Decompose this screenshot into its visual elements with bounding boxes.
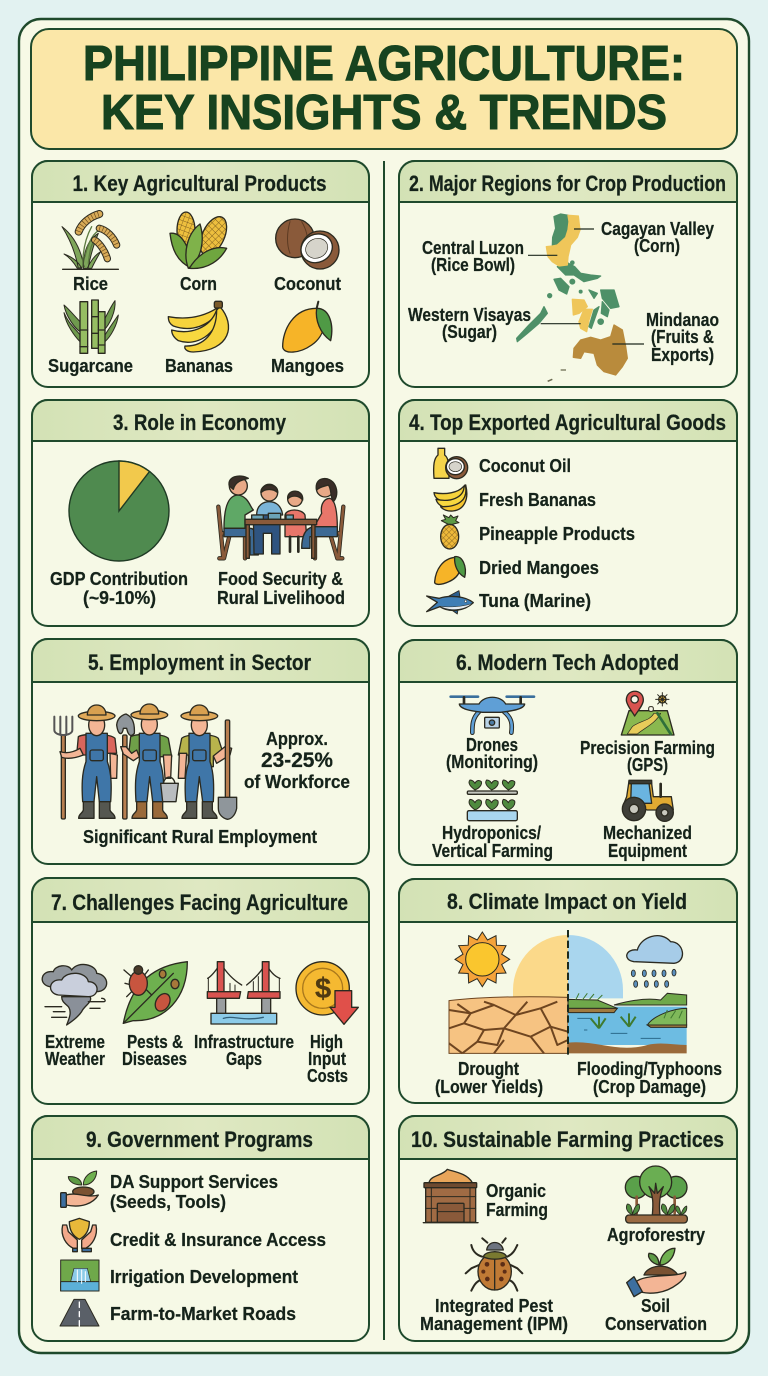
label: equipment: Equipment (608, 841, 687, 861)
panel: 10. Sustainable Farming Practices: 10. Sustainable Farming Practices (411, 1127, 724, 1152)
label: seeds and tools: (Seeds, Tools) (110, 1192, 226, 1212)
label: sugar: (Sugar) (442, 322, 497, 342)
panel: 4. Top Exported Agricultural Goods (399, 400, 737, 626)
label: infrastructure: Infrastructure (194, 1032, 294, 1052)
icon: tuna (427, 591, 473, 614)
icon: beneficial beetle (466, 1238, 522, 1291)
icon: dollar sign: $ (315, 973, 331, 1005)
tool: spade (218, 720, 237, 819)
panel: 1. Key Agricultural Products (32, 161, 369, 387)
label: corn region: (Corn) (634, 236, 680, 256)
label: exports: Exports) (651, 345, 714, 365)
panel: 3. Role in Economy (32, 400, 369, 626)
label: high: High (310, 1032, 343, 1052)
icon: three farmers with tools (54, 704, 237, 819)
icon: high input costs (296, 962, 358, 1024)
illustration: drought versus flood (449, 930, 687, 1055)
label: Mindanao: Mindanao (646, 310, 719, 330)
label: pineapple products: Pineapple Products (479, 524, 635, 544)
tool: pitchfork (54, 717, 72, 819)
label: rural employment: Significant Rural Employment (83, 827, 317, 847)
icon: dried mango (435, 557, 465, 584)
label: hydroponics: Hydroponics/ (442, 823, 541, 843)
label: bananas: Bananas (165, 356, 233, 376)
label: farming: Farming (486, 1200, 548, 1220)
label: IPM: Management (IPM) (420, 1314, 568, 1334)
label: coconut oil: Coconut Oil (479, 456, 571, 476)
icon: corn (170, 212, 232, 269)
label: conservation: Conservation (605, 1314, 707, 1334)
column divider (383, 161, 385, 1340)
icon: compost bin (423, 1169, 478, 1223)
title banner: PHILIPPINE AGRICULTURE: (83, 37, 685, 91)
label: diseases: Diseases (122, 1049, 187, 1069)
label: coconut: Coconut (274, 274, 341, 294)
label: soil: Soil (641, 1296, 670, 1316)
label: drought: Drought (458, 1059, 519, 1079)
label: gaps: Gaps (226, 1049, 262, 1069)
label: fruits and: (Fruits & (651, 327, 714, 347)
farmer three (178, 705, 232, 818)
label: mechanized: Mechanized (603, 823, 692, 843)
label: mangoes: Mangoes (271, 356, 344, 376)
icon: mango (283, 302, 332, 352)
map of the Philippines (517, 214, 644, 382)
icon: soil conservation (627, 1248, 686, 1297)
icon: infrastructure gaps (207, 962, 280, 1024)
panel: 5. Employment in Sector: 5. Employment in Sector (88, 650, 311, 675)
icon: road (60, 1299, 99, 1326)
icon: family at table (218, 476, 343, 558)
icon: agroforestry (625, 1166, 687, 1223)
icon: rice (62, 214, 118, 269)
label: tuna: Tuna (Marine) (479, 591, 591, 611)
label: monitoring: (Monitoring) (446, 752, 538, 772)
panel: 8. Climate Impact on Yield (399, 879, 737, 1103)
label: GDP share: (~9-10%) (83, 588, 156, 608)
label: GDP contribution: GDP Contribution (50, 569, 188, 589)
icon: irrigation (61, 1260, 99, 1291)
icon: hydroponics (467, 780, 517, 821)
flood side (568, 935, 687, 1053)
icon: drone (451, 697, 534, 733)
icon: support services (61, 1171, 98, 1207)
icon: bananas (168, 301, 229, 352)
panel: 3. Role in Economy: 3. Role in Economy (113, 410, 286, 435)
label: dried mangoes: Dried Mangoes (479, 558, 599, 578)
label: extreme: Extreme (45, 1032, 105, 1052)
panel: 8. Climate Impact on Yield: 8. Climate Impact on Yield (447, 889, 687, 914)
label: sugarcane: Sugarcane (48, 356, 133, 376)
panel: 9. Government Programs: 9. Government Programs (86, 1127, 313, 1152)
icon: coconut oil (434, 448, 468, 479)
icon: GPS precision farming (621, 691, 674, 735)
icon: fresh bananas (434, 485, 467, 511)
stat: workforce share: of Workforce (244, 772, 350, 792)
icon: extreme weather (42, 964, 107, 1025)
panel: 2. Major Regions for Crop Production (399, 161, 737, 387)
label: pests: Pests & (127, 1032, 183, 1052)
icon: pineapple (441, 515, 459, 549)
label: corn: Corn (180, 274, 217, 294)
label: vertical farming: Vertical Farming (432, 841, 553, 861)
panel: 5. Employment in Sector (32, 639, 369, 864)
label: lower yields: (Lower Yields) (435, 1077, 543, 1097)
panel: 9. Government Programs (32, 1116, 369, 1341)
panel: 1. Key Agricultural Products: 1. Key Agricultural Products (72, 171, 326, 196)
title banner: KEY INSIGHTS & TRENDS (101, 86, 667, 140)
icon: tractor (622, 780, 673, 821)
drought side (449, 932, 568, 1053)
label: organic: Organic (486, 1181, 546, 1201)
label: credit and insurance: Credit & Insurance Access (110, 1230, 326, 1250)
label: fresh bananas: Fresh Bananas (479, 490, 596, 510)
icon: credit and insurance (62, 1218, 96, 1252)
panel: 6. Modern Tech Adopted (399, 640, 737, 865)
label: GPS: (GPS) (627, 755, 668, 775)
panel: 10. Sustainable Farming Practices (399, 1116, 737, 1341)
icon: sugarcane (64, 300, 118, 353)
label: Cagayan Valley: Cagayan Valley (601, 219, 714, 239)
label: drones: Drones (466, 735, 518, 755)
panel: 6. Modern Tech Adopted: 6. Modern Tech Adopted (456, 650, 679, 675)
label: costs: Costs (307, 1066, 348, 1086)
label: agroforestry: Agroforestry (607, 1225, 705, 1245)
label: integrated pest: Integrated Pest (435, 1296, 553, 1316)
label: food security: Food Security & (218, 569, 343, 589)
icon: coconut (276, 219, 339, 269)
label: crop damage: (Crop Damage) (593, 1077, 706, 1097)
label: Central Luzon: Central Luzon (422, 238, 524, 258)
stat: workforce share: Approx. (266, 729, 328, 749)
label: rice: Rice (73, 274, 108, 294)
panel: 7. Challenges Facing Agriculture (32, 878, 369, 1104)
label: roads: Farm-to-Market Roads (110, 1304, 296, 1324)
tool: shovel (117, 714, 134, 819)
label: Western Visayas: Western Visayas (408, 305, 531, 325)
title banner (31, 29, 737, 149)
label: weather: Weather (45, 1049, 105, 1069)
farmer two (121, 704, 178, 818)
icon: pests and diseases (123, 962, 187, 1023)
label: precision farming: Precision Farming (580, 738, 715, 758)
label: input: Input (308, 1049, 346, 1069)
label: irrigation: Irrigation Development (110, 1267, 298, 1287)
panel: 7. Challenges Facing Agriculture: 7. Challenges Facing Agriculture (51, 890, 348, 915)
stat: workforce share: 23-25% (261, 749, 333, 772)
label: DA support: DA Support Services (110, 1172, 278, 1192)
farmer one (60, 705, 117, 818)
stat: workforce share (244, 729, 350, 792)
label: flooding: Flooding/Typhoons (577, 1059, 722, 1079)
label: rice bowl: (Rice Bowl) (431, 255, 515, 275)
pie chart: GDP contribution (69, 461, 169, 561)
label: rural livelihood: Rural Livelihood (217, 588, 345, 608)
